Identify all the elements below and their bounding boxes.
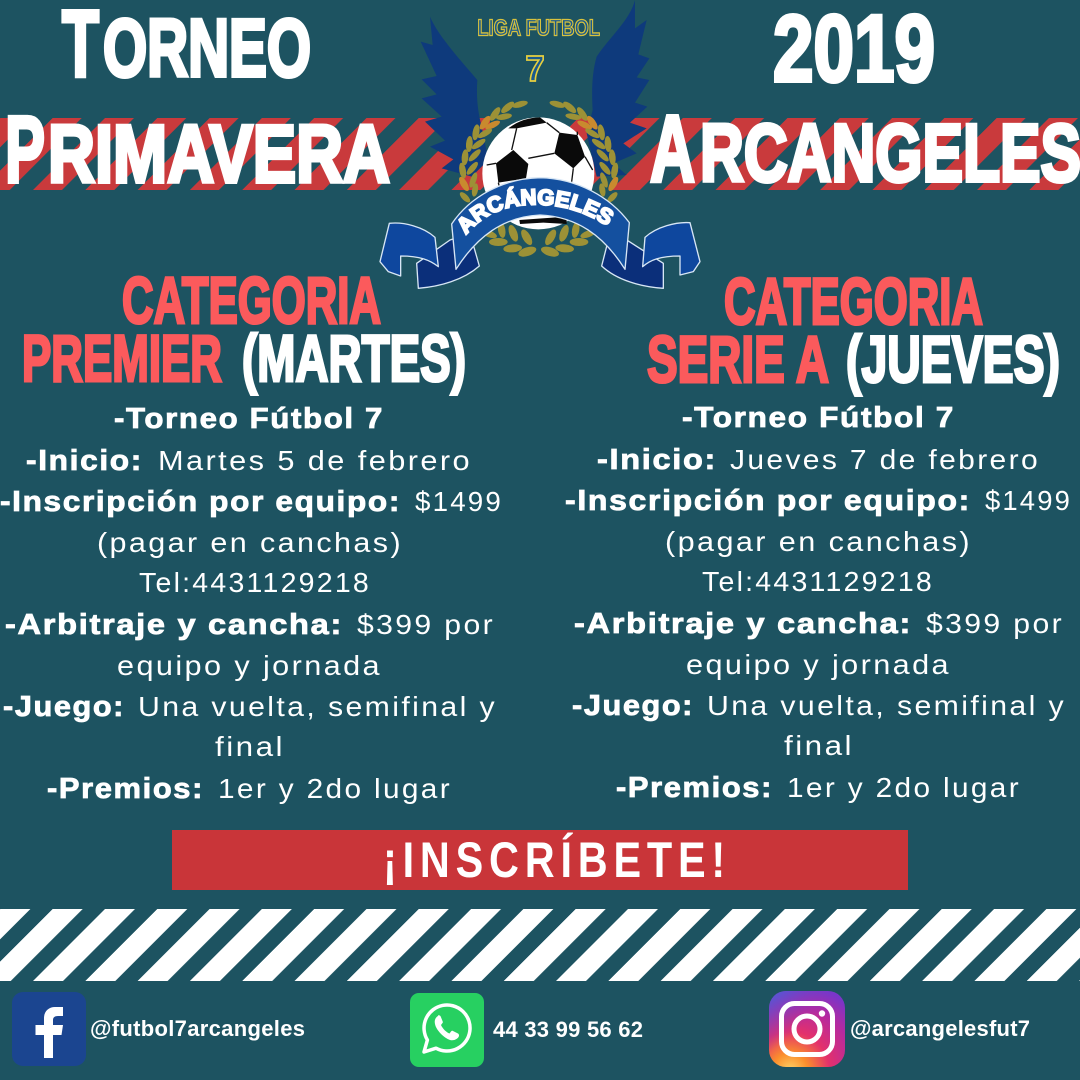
text block: details serie a bbox=[565, 402, 1072, 804]
text block: details premier: (pagar en canchas) bbox=[97, 527, 403, 558]
text block: details serie a: 1er y 2do lugar bbox=[787, 772, 1021, 803]
heading: Categoria Premier (Martes): (MARTES) bbox=[242, 321, 466, 395]
text block: details serie a: $1499 bbox=[985, 485, 1072, 516]
text block: details serie a: Jueves 7 de febrero bbox=[730, 444, 1040, 475]
text block: details premier: 1er y 2do lugar bbox=[218, 773, 452, 804]
icon: ribbon tails bbox=[380, 223, 700, 288]
icon: facebook bbox=[12, 992, 86, 1066]
text block: details premier: -Inicio: bbox=[26, 445, 143, 477]
text block: details serie a: -Inicio: bbox=[597, 444, 717, 476]
text block: details serie a: Una vuelta, semifinal y bbox=[707, 690, 1066, 721]
text block: details premier: -Juego: bbox=[3, 691, 125, 723]
title: Primavera: RIMAVERA bbox=[48, 109, 390, 200]
icon: ribbon arch bbox=[452, 178, 629, 269]
social: instagram: @arcangelesfut7 bbox=[850, 1016, 1030, 1041]
text block: details premier: Tel:4431129218 bbox=[139, 567, 371, 598]
heading: Categoria Serie A (Jueves) bbox=[647, 264, 1060, 396]
title: Torneo bbox=[62, 0, 311, 97]
panel: categoria serie a bbox=[565, 264, 1072, 804]
text block: details premier: Una vuelta, semifinal y bbox=[138, 691, 497, 722]
heading: Categoria Premier (Martes): CATEGORIA bbox=[122, 263, 381, 337]
icon: left wing bbox=[421, 17, 488, 177]
icon: whatsapp bbox=[410, 993, 484, 1067]
logo text: 7: 7 bbox=[525, 48, 545, 89]
text block: details serie a: $399 por bbox=[926, 608, 1064, 639]
title: Primavera: P bbox=[5, 97, 45, 203]
text block: details premier bbox=[0, 403, 503, 805]
text block: details premier: equipo y jornada bbox=[117, 650, 382, 681]
text block: details serie a: -Torneo Fútbol 7 bbox=[682, 402, 955, 434]
text block: details premier: $1499 bbox=[415, 486, 503, 517]
text block: details premier: -Premios: bbox=[47, 773, 204, 805]
heading: Categoria Premier (Martes) bbox=[22, 263, 466, 395]
text block: details serie a: equipo y jornada bbox=[686, 649, 951, 680]
panel: categoria premier bbox=[0, 263, 503, 805]
social: instagram bbox=[769, 991, 1030, 1067]
title: Arcangeles: A bbox=[650, 96, 695, 202]
social: facebook: @futbol7arcangeles bbox=[90, 1016, 305, 1041]
logo: Arcangeles crest bbox=[379, 0, 701, 289]
red diagonal band right bbox=[570, 118, 1080, 190]
text block: details premier: $399 por bbox=[357, 609, 495, 640]
call to action button bbox=[172, 830, 908, 890]
social: whatsapp bbox=[410, 993, 643, 1067]
red diagonal band left bbox=[0, 118, 490, 190]
text block: details serie a: -Premios: bbox=[616, 772, 773, 804]
text block: details serie a: -Inscripción por equipo: bbox=[565, 485, 971, 517]
icon: instagram bbox=[769, 991, 845, 1067]
icon: right wing bbox=[587, 0, 649, 177]
social: whatsapp: 44 33 99 56 62 bbox=[493, 1017, 643, 1042]
text block: details premier: -Arbitraje y cancha: bbox=[5, 609, 343, 641]
text block: details premier: -Torneo Fútbol 7 bbox=[114, 403, 384, 435]
white diagonal stripes band bbox=[0, 909, 1080, 981]
text block: details serie a: final bbox=[784, 730, 854, 761]
title: Torneo: ORNEO bbox=[103, 3, 311, 94]
text block: details serie a: -Juego: bbox=[572, 690, 694, 722]
text block: details serie a: -Arbitraje y cancha: bbox=[574, 608, 912, 640]
text block: details premier: Martes 5 de febrero bbox=[158, 445, 472, 476]
call to action button: ¡INSCRÍBETE! bbox=[383, 832, 731, 888]
text block: details serie a: Tel:4431129218 bbox=[702, 566, 934, 597]
icon: laurel wreath bbox=[457, 99, 620, 259]
text block: details premier: -Inscripción por equipo: bbox=[0, 486, 401, 518]
heading: Categoria Serie A (Jueves): SERIE A bbox=[647, 322, 829, 396]
icon: soccer ball bbox=[482, 117, 594, 229]
logo text: Liga Futbol: LIGA FUTBOL bbox=[477, 14, 600, 40]
heading: Categoria Premier (Martes): PREMIER bbox=[22, 321, 222, 395]
text block: details serie a: (pagar en canchas) bbox=[665, 526, 972, 557]
text block: details premier: final bbox=[215, 731, 285, 762]
social: facebook bbox=[12, 992, 305, 1066]
title: Primavera bbox=[5, 97, 390, 203]
ribbon text: ARCÁNGELES: ARCÁNGELES bbox=[458, 186, 614, 236]
